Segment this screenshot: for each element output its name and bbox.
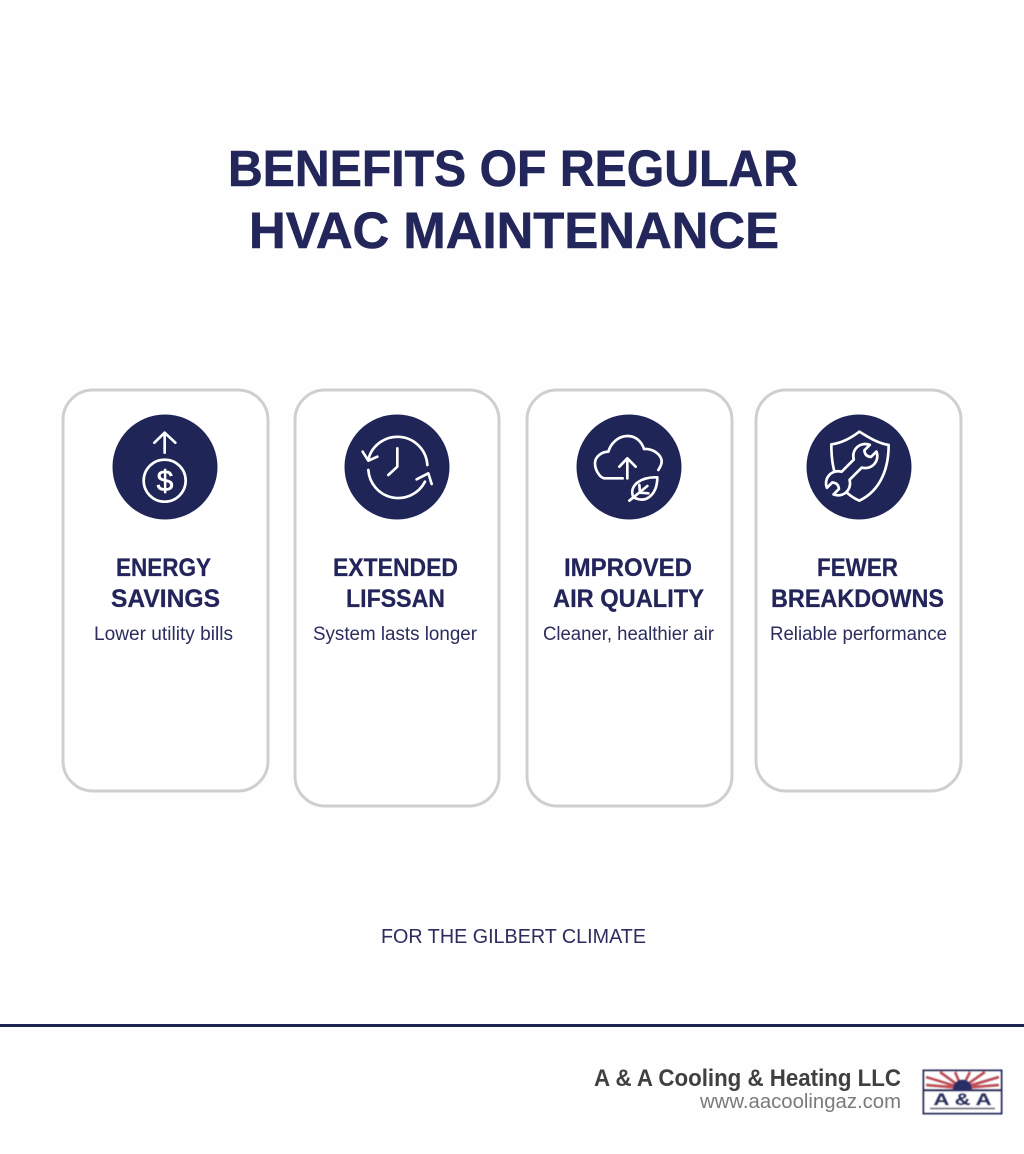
footer company name: A & A Cooling & Heating LLC [594, 1065, 901, 1092]
card frame [295, 390, 499, 806]
heading [111, 554, 220, 613]
heading [553, 554, 704, 613]
icon: dollar coin with up arrow: $ [157, 465, 174, 498]
heading [771, 554, 944, 613]
icon: company logo [924, 1070, 1002, 1114]
icon: dollar coin with up arrow [112, 414, 218, 520]
heading: BREAKDOWNS [771, 585, 944, 613]
icon: shield with wrench [806, 414, 912, 520]
footer website: www.aacoolingaz.com [699, 1091, 901, 1113]
title: BENEFITS OF REGULAR [228, 140, 798, 197]
description: Cleaner, healthier air [543, 624, 715, 645]
description: System lasts longer [313, 624, 478, 645]
heading: ENERGY [116, 554, 211, 582]
heading [333, 554, 458, 613]
description: Lower utility bills [94, 624, 233, 645]
heading: FEWER [817, 554, 898, 582]
card frame [63, 390, 268, 791]
icon: company logo: A & A [934, 1090, 992, 1109]
panel: extended lifespan [295, 390, 499, 806]
panel: improved air quality [527, 390, 732, 806]
title [228, 140, 798, 259]
heading: SAVINGS [111, 585, 220, 613]
icon: cloud with leaf [576, 414, 682, 520]
heading: IMPROVED [564, 554, 692, 582]
card frame [527, 390, 732, 806]
description: Reliable performance [770, 624, 947, 645]
title: HVAC MAINTENANCE [249, 202, 779, 259]
heading: EXTENDED [333, 554, 458, 582]
card frame [756, 390, 961, 791]
panel: fewer breakdowns [756, 390, 961, 791]
heading: AIR QUALITY [553, 585, 704, 613]
icon: clock with circular arrows [344, 414, 450, 520]
tagline: FOR THE GILBERT CLIMATE [381, 926, 646, 948]
heading: LIFSSAN [346, 585, 445, 613]
panel: energy savings [63, 390, 268, 791]
